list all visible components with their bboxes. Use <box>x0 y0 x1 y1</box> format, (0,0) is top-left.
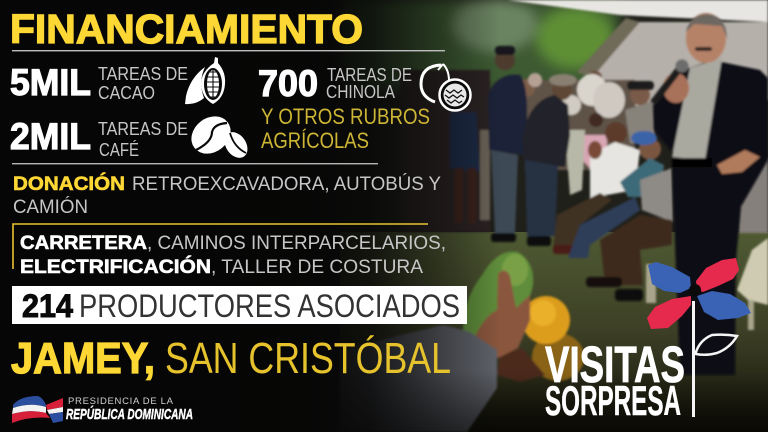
stat: 5MIL cacao: CACAO <box>98 83 155 103</box>
photo: man in dark jacket <box>522 74 577 246</box>
title: FINANCIAMIENTO <box>10 6 363 52</box>
icon: cacao pod <box>185 57 225 104</box>
other crops note: AGRÍCOLAS <box>261 128 369 153</box>
logo: Presidencia: PRESIDENCIA DE LA <box>68 396 174 407</box>
location: SAN CRISTÓBAL <box>165 334 451 383</box>
stat: 2MIL cafe: TAREAS DE <box>98 119 188 139</box>
logo: Presidencia <box>12 396 193 423</box>
photo: dark left overlay <box>0 0 500 432</box>
photo: foliage <box>340 0 620 90</box>
infrastructure text: , CAMINOS INTERPARCELARIOS, <box>147 232 446 254</box>
producers banner: 214 <box>22 288 73 324</box>
icon: flag <box>12 396 63 423</box>
infrastructure text: , TALLER DE COSTURA <box>211 256 423 278</box>
infrastructure text: CARRETERA <box>20 232 147 254</box>
stat: 700 chinola <box>258 63 470 110</box>
photo: seated clapping man <box>553 122 640 254</box>
stat: 700 chinola: 700 <box>258 63 318 104</box>
infrastructure bracket <box>13 224 428 269</box>
logo: Visitas Sorpresa <box>545 258 751 424</box>
icon: passion fruit <box>421 64 470 110</box>
logo: Presidencia: REPÚBLICA DOMINICANA <box>66 405 193 423</box>
photo: woman in dress <box>450 112 480 172</box>
stat: 2MIL cafe: CAFÉ <box>99 140 139 160</box>
donation text <box>13 171 441 218</box>
donation text: RETROEXCAVADORA, AUTOBÚS Y <box>132 172 441 195</box>
stat: 5MIL cacao <box>10 57 225 104</box>
location <box>11 334 451 383</box>
donation text: CAMIÓN <box>13 195 88 218</box>
photo: seated plaid man <box>586 158 768 330</box>
photo: crowd <box>400 46 768 330</box>
photo: man in navy jacket <box>488 46 527 242</box>
icon: flower <box>647 258 751 417</box>
photo: fruit and hand <box>340 251 584 432</box>
infrastructure text: ELECTRIFICACIÓN <box>20 254 211 278</box>
other crops note <box>261 104 430 153</box>
donation text: DONACIÓN <box>13 171 125 195</box>
photo: ground <box>340 232 768 432</box>
location: JAMEY, <box>11 334 155 383</box>
photo: man in blue cap <box>568 131 664 258</box>
stat: 2MIL cafe <box>10 109 252 162</box>
stat: 700 chinola: CHINOLA <box>326 82 395 102</box>
logo: Visitas Sorpresa: VISITAS <box>545 336 685 393</box>
stat: 5MIL cacao: TAREAS DE <box>98 64 188 84</box>
icon: coffee beans <box>184 109 252 162</box>
producers banner: PRODUCTORES ASOCIADOS <box>79 288 460 324</box>
photo: speaker <box>653 13 768 375</box>
infrastructure text <box>20 232 446 278</box>
stat: 2MIL cafe: 2MIL <box>10 116 91 157</box>
stat: 5MIL cacao: 5MIL <box>10 62 91 103</box>
photo: building and tent <box>507 0 768 110</box>
other crops note: Y OTROS RUBROS <box>261 104 430 129</box>
stat: 700 chinola: TAREAS DE <box>327 65 412 85</box>
